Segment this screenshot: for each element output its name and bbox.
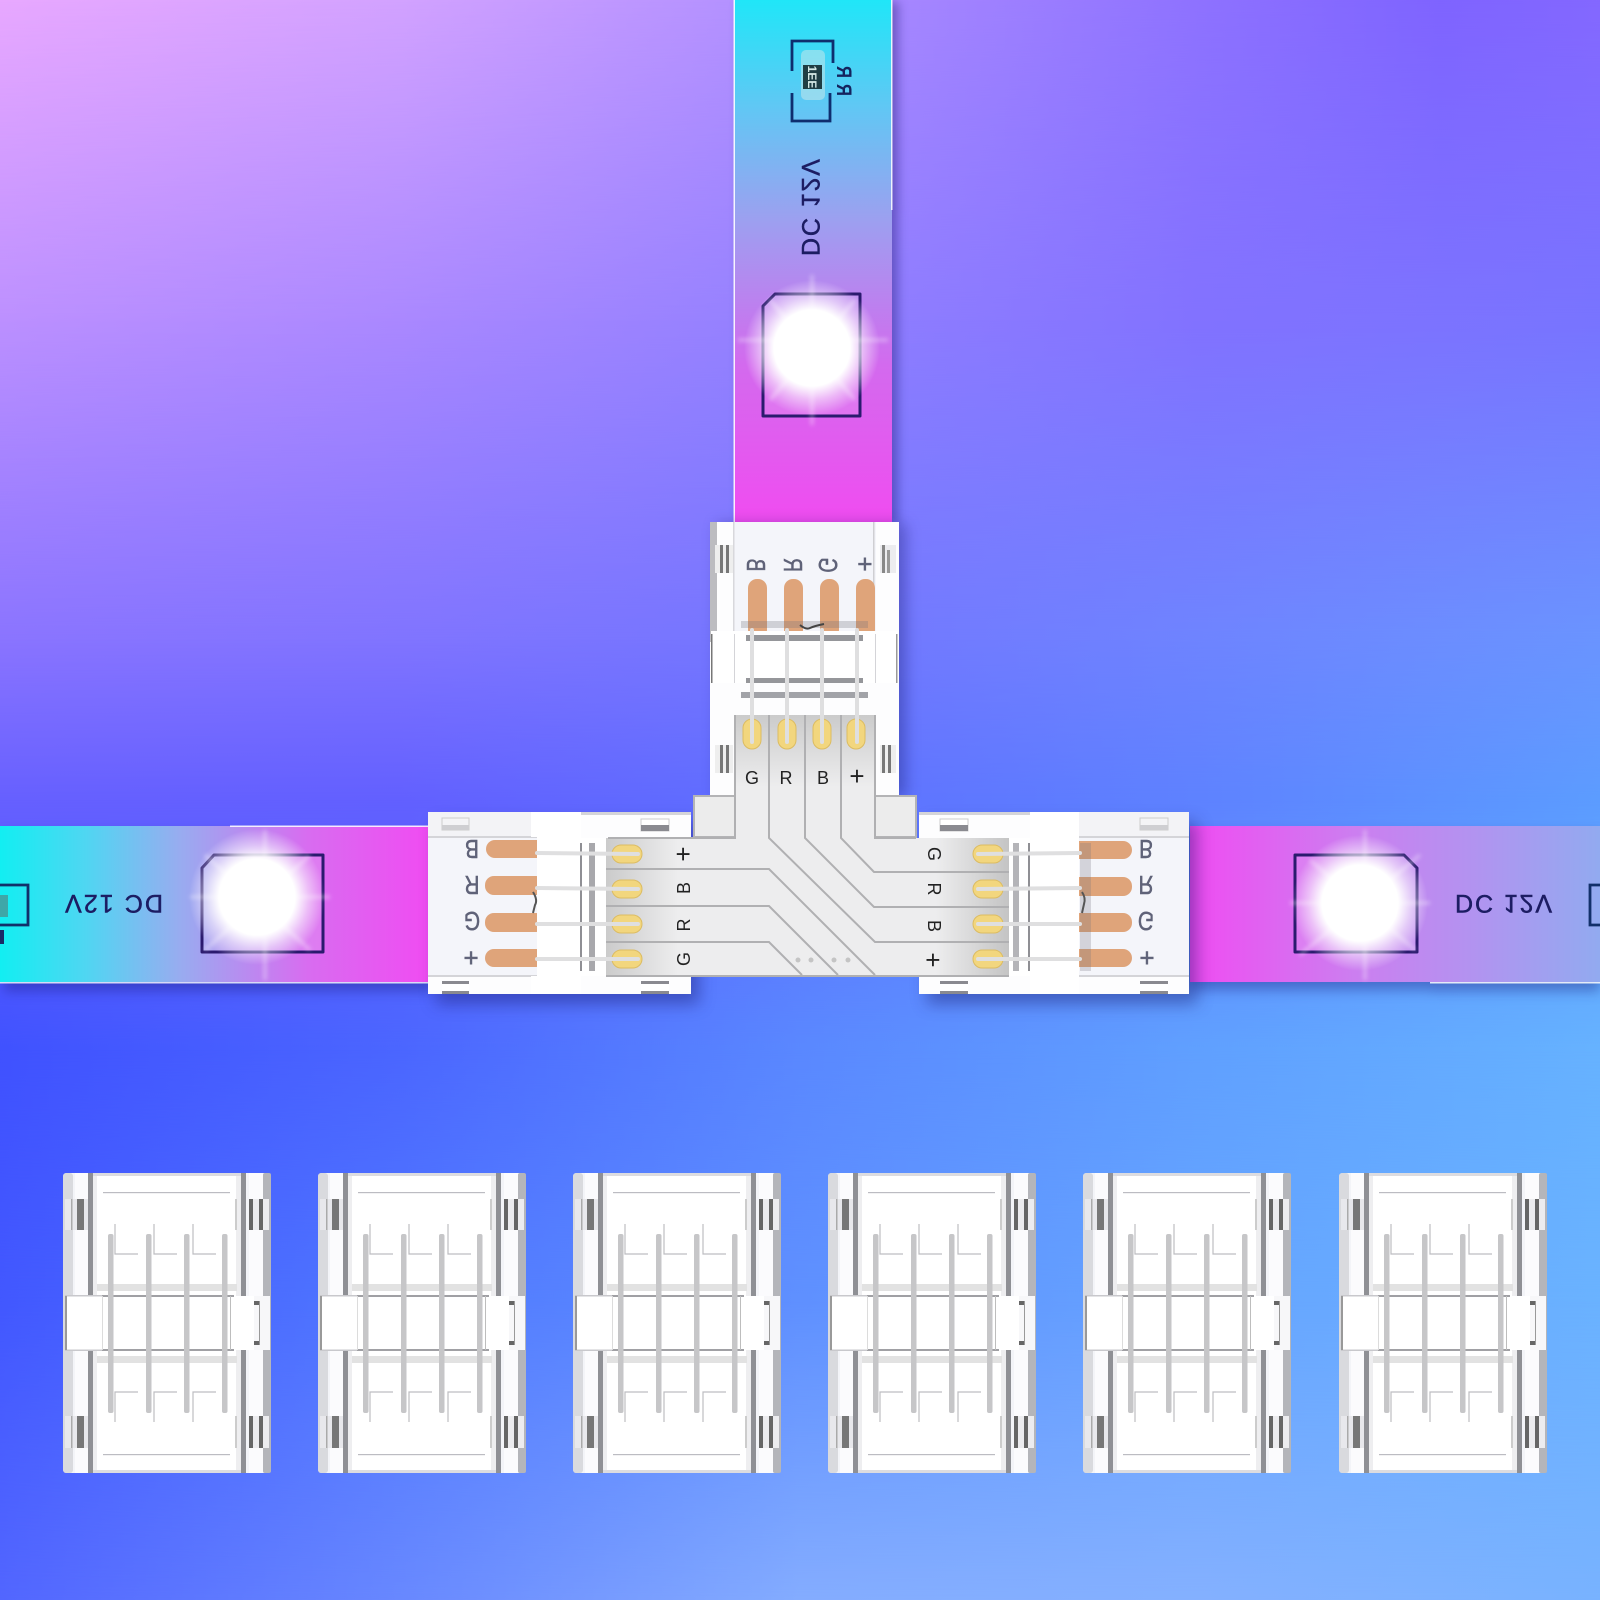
board labels left — [668, 846, 698, 966]
LED: left — [189, 829, 330, 980]
left clip white band — [531, 812, 606, 994]
resistor component: 1EE — [805, 66, 819, 88]
right clip — [919, 812, 1189, 994]
board labels right: G — [924, 847, 944, 861]
left clip — [428, 812, 691, 994]
board ears — [694, 796, 916, 837]
top clip — [710, 522, 899, 795]
top clip white band — [711, 631, 898, 698]
board labels right: B — [924, 920, 944, 932]
top clip printed labels: B — [741, 558, 771, 572]
strip text: DC 12V: DC 12V — [65, 889, 163, 917]
board labels right: R — [924, 882, 944, 896]
left clip printed labels — [463, 834, 480, 973]
resistor component: R — [831, 66, 855, 78]
resistor component — [792, 41, 855, 121]
right clip tabs — [940, 818, 1168, 994]
left clip printed labels: G — [464, 906, 480, 935]
strip text: DC 12V: DC 12V — [796, 159, 824, 256]
left clip printed labels: B — [465, 834, 479, 863]
left clip tabs — [442, 818, 669, 994]
left clip printed labels: R — [464, 870, 480, 899]
resistor component: R — [831, 84, 855, 96]
board labels top: G — [745, 768, 759, 788]
right clip printed labels: G — [1138, 906, 1154, 935]
left clip printed labels: + — [463, 943, 479, 973]
board labels top: + — [849, 761, 865, 791]
right clip printed labels: B — [1139, 834, 1153, 863]
spare clip 4 — [828, 1173, 1036, 1473]
LED: top — [738, 275, 888, 425]
right clip printed labels: R — [1138, 870, 1154, 899]
top clip copper pins — [748, 579, 875, 639]
board vias — [796, 958, 850, 962]
LED strip: left — [0, 826, 428, 984]
board labels left: R — [674, 918, 694, 932]
board labels left: + — [668, 846, 698, 862]
LED strip: right — [1190, 826, 1600, 984]
board labels top — [745, 761, 865, 791]
circuit board — [606, 715, 1009, 976]
board labels right — [918, 847, 948, 968]
LED strip: top — [734, 0, 892, 522]
right clip white band — [1009, 812, 1085, 994]
T connector — [428, 522, 1189, 994]
right clip printed labels: + — [1139, 943, 1155, 973]
board labels top: R — [780, 768, 792, 788]
spare clip 6 — [1339, 1173, 1547, 1473]
board labels right: + — [918, 952, 948, 968]
top clip tabs — [715, 545, 896, 773]
spare clip 5 — [1083, 1173, 1291, 1473]
top clip printed labels: R — [778, 558, 808, 572]
connector wires — [537, 630, 1080, 959]
gold solder pads — [612, 719, 1003, 968]
right clip copper pins — [1070, 841, 1132, 967]
resistor stub — [1590, 885, 1600, 925]
board traces — [606, 715, 1009, 976]
left clip copper pins — [485, 840, 546, 967]
top clip printed labels: + — [850, 556, 880, 572]
LED: right — [1290, 830, 1430, 980]
top clip printed labels: G — [813, 557, 843, 573]
spare clip 1 — [63, 1173, 271, 1473]
board labels top: B — [817, 768, 829, 788]
board labels left: B — [674, 882, 694, 894]
spare clip 2 — [318, 1173, 526, 1473]
board labels left: G — [674, 952, 694, 966]
spare clip 3 — [573, 1173, 781, 1473]
strip text: DC 12V: DC 12V — [1455, 889, 1552, 917]
resistor stub — [0, 885, 28, 944]
right clip printed labels — [1138, 834, 1155, 973]
top clip printed labels — [741, 556, 880, 573]
